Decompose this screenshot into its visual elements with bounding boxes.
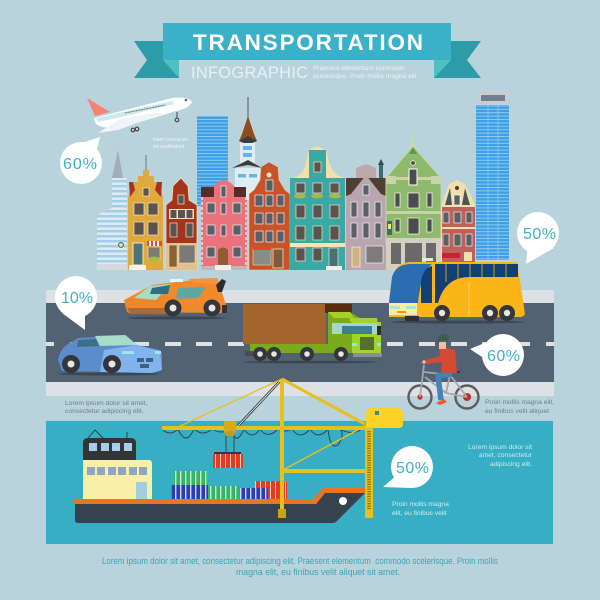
cyclist — [408, 334, 478, 408]
title: TRANSPORTATION — [193, 30, 423, 55]
footer text — [102, 556, 498, 577]
sea caption right: amet, consectetur — [479, 452, 533, 459]
plane caption: Nam cursus eu — [153, 137, 188, 143]
pale glass building — [97, 150, 127, 270]
crane cab — [366, 408, 403, 428]
ship cabin — [83, 430, 152, 499]
grey spire tower — [232, 97, 262, 200]
sea caption right: Lorem ipsum dolor sit — [468, 444, 532, 451]
footer text: magna elit, eu finibus velit aliquet sit amet. — [236, 567, 400, 577]
bubble: 60% bike — [470, 334, 524, 376]
crane cables — [162, 429, 362, 446]
crane tower — [365, 425, 373, 518]
banner description: scelerisque. Proin mollis magna elit — [313, 73, 417, 80]
yellow house — [128, 155, 163, 270]
title banner — [134, 23, 481, 78]
bubble: 60% air: 60% — [63, 156, 97, 173]
blue tower left — [197, 116, 228, 206]
orange house — [249, 162, 290, 270]
mauve house — [346, 159, 386, 270]
sea panel — [46, 421, 553, 544]
airplane — [87, 98, 192, 133]
pink house — [201, 180, 247, 270]
cargo ship — [74, 430, 365, 523]
footer text: Lorem ipsum dolor sit amet, consectetur adipiscing elit. Praesent elementum commodo scelerisque. Proin mollis — [102, 556, 498, 566]
caption: left road: Lorem ipsum dolor sit amet, — [65, 400, 148, 407]
bubble: 50% sea: 50% — [396, 460, 429, 477]
bubble: 60% bike: 60% — [487, 348, 520, 365]
caption: right road: Proin mollis magna elit, — [485, 399, 554, 406]
dark red house — [166, 178, 197, 270]
tall blue tower right — [476, 90, 509, 260]
bubble: 10% — [55, 276, 97, 330]
small red house — [441, 180, 475, 265]
sea caption right: adipiscing elit. — [490, 461, 532, 468]
blue sports car — [58, 335, 162, 376]
bubble: 50% road — [517, 212, 559, 264]
green house — [386, 130, 441, 270]
caption: left road: consectetur adipiscing elit. — [65, 408, 144, 415]
bus — [389, 258, 525, 324]
bubble: 50% road: 50% — [523, 226, 556, 243]
bubble: 10%: 10% — [61, 290, 93, 307]
gantry crane — [162, 379, 403, 518]
banner description: Praesent elementum commodo — [313, 65, 405, 72]
sea caption under bubble: elit, eu finibus velit — [392, 510, 447, 517]
bubble: 60% air — [60, 137, 102, 184]
containers — [171, 471, 287, 499]
ship hull — [74, 488, 365, 523]
road — [46, 290, 554, 396]
bubble: 50% sea — [383, 446, 433, 488]
trolley and hoisted container — [213, 421, 243, 468]
orange sports car — [124, 278, 227, 320]
truck — [242, 304, 382, 363]
teal house — [290, 147, 345, 270]
sea caption under bubble: Proin mollis magna — [392, 501, 449, 508]
subtitle: INFOGRAPHIC — [191, 64, 308, 82]
plane caption: sit vestibulum. — [153, 144, 186, 150]
caption: right road: eu finibus velit aliquet — [485, 408, 549, 415]
